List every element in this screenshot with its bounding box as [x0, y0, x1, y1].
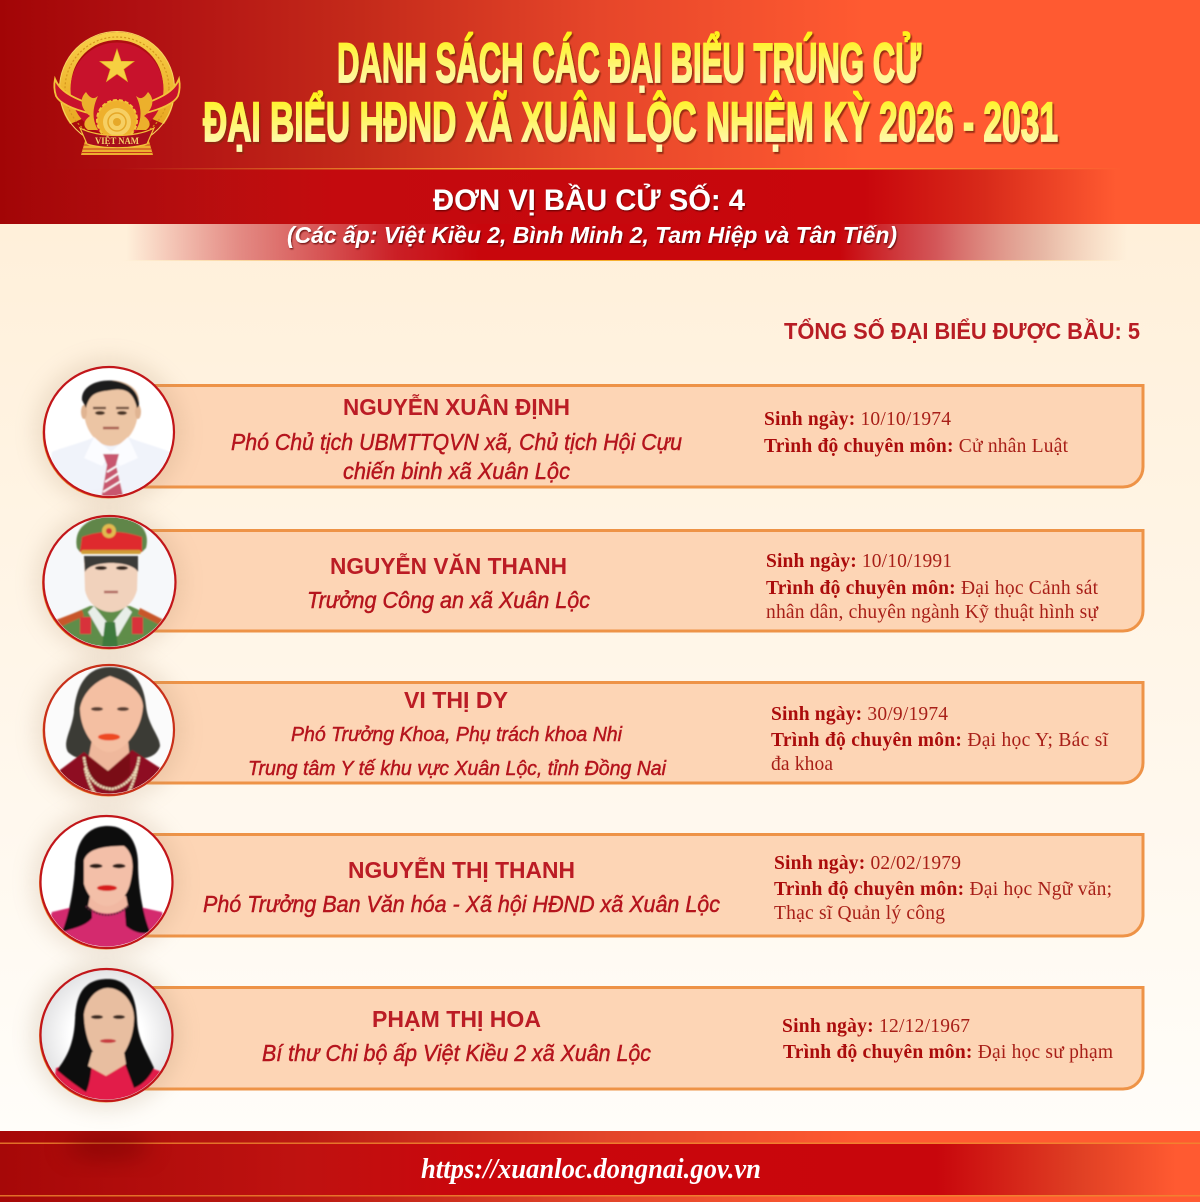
details: Sinh ngày: 12/12/1967: [782, 1016, 970, 1037]
panel: delegate 4: [31, 807, 1143, 957]
details: Trình độ chuyên môn: Đại học sư phạm: [783, 1042, 1113, 1063]
details: nhân dân, chuyên ngành Kỹ thuật hình sự: [766, 602, 1099, 623]
role: [231, 429, 682, 484]
details: [771, 704, 1109, 775]
card: [130, 682, 1143, 783]
details: [766, 551, 1099, 623]
icon: national emblem: VIỆT NAM: [95, 136, 139, 146]
footer: [0, 1131, 1200, 1202]
role: Phó Trưởng Khoa, Phụ trách khoa Nhi: [291, 723, 623, 746]
panel: delegate 3: [34, 655, 1143, 805]
portrait: [31, 960, 181, 1110]
portrait: [34, 507, 184, 657]
heading: electoral unit: ĐƠN VỊ BẦU CỬ SỐ: 4: [433, 183, 745, 217]
details: Trình độ chuyên môn: Đại học Ngữ văn;: [774, 879, 1112, 900]
role: Phó Trưởng Ban Văn hóa - Xã hội HĐND xã Xuân Lộc: [203, 891, 720, 917]
details: Trình độ chuyên môn: Cử nhân Luật: [764, 436, 1069, 457]
panel: delegate 5: [31, 960, 1143, 1110]
role: Trưởng Công an xã Xuân Lộc: [307, 587, 590, 613]
header panel: [0, 0, 1200, 261]
name: NGUYỄN XUÂN ĐỊNH: [343, 392, 570, 420]
role: Phó Chủ tịch UBMTTQVN xã, Chủ tịch Hội Cựu: [231, 429, 682, 455]
name: VI THỊ DY: [404, 687, 508, 713]
footer website url: https://xuanloc.dongnai.gov.vn: [421, 1153, 761, 1185]
name: NGUYỄN VĂN THANH: [330, 551, 567, 579]
icon: national emblem: [54, 32, 180, 155]
details: Sinh ngày: 02/02/1979: [774, 853, 961, 874]
role: Bí thư Chi bộ ấp Việt Kiều 2 xã Xuân Lộc: [262, 1040, 651, 1066]
subheading: hamlets: (Các ấp: Việt Kiều 2, Bình Minh 2, Tam Hiệp và Tân Tiến): [287, 222, 897, 248]
details: Sinh ngày: 10/10/1991: [766, 551, 952, 572]
details: Trình độ chuyên môn: Đại học Cảnh sát: [766, 578, 1099, 599]
card: [130, 530, 1143, 631]
details: [764, 409, 1069, 457]
panel: delegate 1: [34, 357, 1143, 507]
portrait: [34, 655, 184, 805]
title: [203, 31, 1058, 153]
name: PHẠM THỊ HOA: [372, 1006, 541, 1032]
role: chiến binh xã Xuân Lộc: [343, 458, 570, 484]
details: [782, 1016, 1113, 1063]
details: Thạc sĩ Quản lý công: [774, 903, 945, 924]
details: Sinh ngày: 30/9/1974: [771, 704, 948, 725]
page background: [0, 224, 1200, 1131]
details: Trình độ chuyên môn: Đại học Y; Bác sĩ: [771, 730, 1109, 751]
panel: delegate 2: [34, 507, 1143, 657]
details: [774, 853, 1112, 924]
details: đa khoa: [771, 754, 833, 775]
role: Trung tâm Y tế khu vực Xuân Lộc, tỉnh Đồng Nai: [248, 757, 667, 780]
card: [130, 834, 1143, 936]
portrait: [31, 807, 181, 957]
card: [130, 386, 1143, 487]
total delegates: TỔNG SỐ ĐẠI BIỂU ĐƯỢC BẦU: 5: [784, 317, 1140, 344]
portrait: [34, 357, 184, 507]
card: [130, 988, 1143, 1089]
role: [248, 723, 667, 780]
details: Sinh ngày: 10/10/1974: [764, 409, 951, 430]
name: NGUYỄN THỊ THANH: [348, 855, 575, 883]
